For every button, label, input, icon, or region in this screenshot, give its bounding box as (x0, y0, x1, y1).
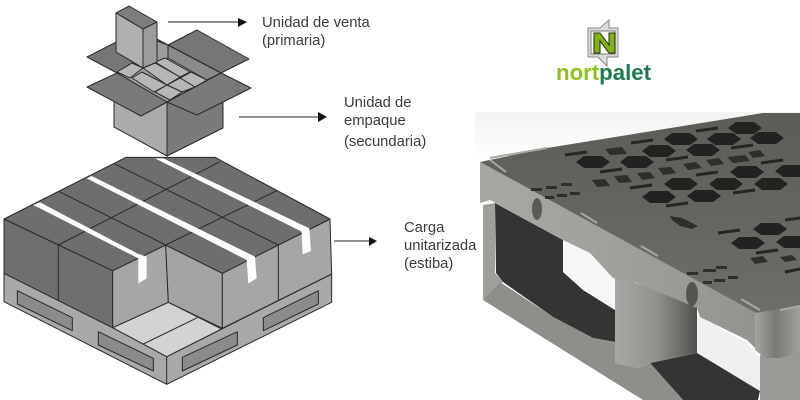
pallet load diagram (4, 157, 332, 384)
corner block (755, 306, 800, 358)
centre leg (615, 275, 697, 368)
photo backdrop (475, 112, 800, 162)
label: secondary unit: empaque (344, 113, 406, 129)
carton left face (114, 102, 167, 156)
logo wordmark: nortpalet (556, 60, 652, 85)
top deck (480, 113, 800, 316)
deck slots (565, 128, 800, 272)
inner primary units (117, 58, 207, 100)
photo: plastic pallet (475, 112, 800, 400)
label: unit load: (estiba) (404, 256, 453, 272)
light right face (222, 219, 332, 328)
pallet floor (113, 302, 222, 357)
side rail (480, 162, 760, 350)
label: secondary unit: Unidad de (344, 95, 411, 111)
deck small vents (531, 147, 797, 284)
logo: nortpalet (556, 20, 652, 85)
carton right face (167, 102, 223, 156)
carton back-right flap (168, 30, 249, 73)
rail round bosses (532, 198, 542, 220)
label: primary unit: (primaria) (262, 33, 325, 49)
carton back-left flap (87, 30, 168, 73)
top box seams (58, 162, 278, 245)
notch inner faces (113, 245, 168, 328)
left leg (483, 203, 503, 300)
carton interior (117, 45, 221, 102)
dark opening rear (495, 203, 615, 342)
arrow to primary unit (168, 18, 247, 27)
label: unit load: Carga (404, 220, 444, 236)
second dark opening (650, 353, 760, 400)
right leg (760, 350, 800, 400)
back window (563, 240, 615, 308)
carton front-right flap (167, 73, 251, 115)
label: secondary unit: (secundaria) (344, 134, 426, 150)
logo icon (588, 20, 618, 66)
label: primary unit: Unidad de venta (262, 15, 370, 31)
wood pallet base (4, 273, 332, 384)
carton front-left flap (87, 73, 167, 116)
pallet slots (17, 291, 318, 371)
arrow to unit load (334, 237, 377, 246)
primary unit box (116, 6, 157, 68)
label: unit load: unitarizada (404, 238, 477, 254)
second window (697, 315, 760, 390)
white tapes (33, 158, 311, 283)
dark side faces (4, 219, 113, 328)
arrow to secondary unit (239, 112, 327, 122)
bottom rail (483, 282, 683, 400)
deck hexagonal holes (576, 122, 800, 249)
deck edge highlights (490, 148, 800, 310)
load top surface (4, 157, 330, 273)
carton box diagram (87, 6, 251, 156)
